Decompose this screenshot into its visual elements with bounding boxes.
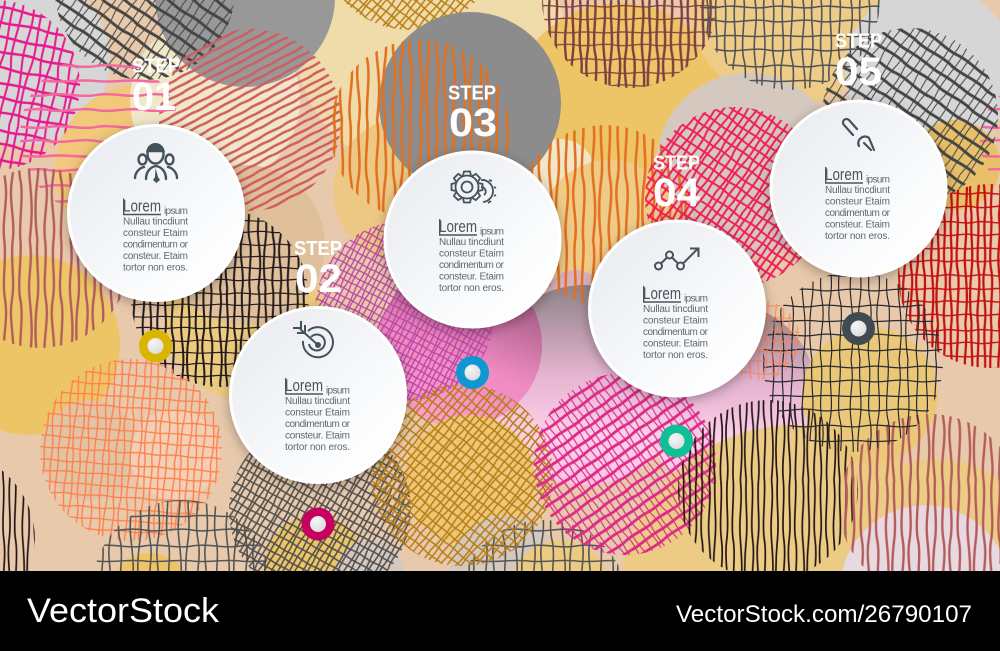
icon: chain links — [843, 119, 874, 150]
step 1 text — [123, 196, 189, 274]
step 4 label: 04 — [653, 171, 701, 215]
step 2 text — [285, 376, 351, 453]
step 4 label — [653, 152, 701, 215]
step 5 text — [825, 165, 891, 242]
step 3 text: condimentum or — [439, 260, 505, 271]
footer brand: VectorStock — [27, 592, 220, 630]
step 3 marker — [456, 356, 489, 389]
step 2 text: condimentum or — [285, 419, 351, 430]
step 1 text: condimentum or — [123, 240, 189, 250]
step 5 text: Nullau tincdiunt — [825, 185, 890, 196]
icon: team of people — [135, 144, 177, 183]
step 2 — [230, 238, 406, 540]
icon: target with arrow — [293, 321, 333, 357]
step 1 text: consteur. Etaim — [123, 251, 188, 262]
icon: rising chart line — [655, 248, 698, 270]
icon: gears — [452, 172, 496, 203]
step 3 text: consteur. Etaim — [439, 272, 504, 282]
step 5 marker — [842, 312, 875, 345]
step 5 — [771, 30, 946, 345]
step 2 text: tortor non eros. — [285, 442, 350, 453]
step 1 text: tortor non eros. — [123, 262, 188, 274]
step 1 — [68, 56, 244, 362]
step 1 text: ipsum — [164, 206, 188, 217]
step 3 text: ipsum — [480, 226, 504, 238]
step 4 disc — [590, 221, 764, 396]
step 3 text: Lorem — [439, 217, 477, 236]
step 3 label — [448, 82, 497, 145]
step 2 text: ipsum — [326, 386, 350, 396]
step 5 text: consteur Etaim — [825, 196, 890, 208]
step 2 disc — [230, 308, 406, 482]
step 1 disc — [68, 126, 244, 300]
footer bar — [0, 571, 1000, 651]
step 1 text: Lorem — [123, 196, 161, 216]
step 1 label: 01 — [132, 75, 176, 119]
step 4 text: Nullau tincdiunt — [643, 304, 708, 315]
step 5 disc — [771, 101, 946, 276]
step 3 label: STEP — [448, 82, 496, 104]
step 3 disc — [385, 152, 560, 327]
step 5 text: Lorem — [825, 165, 863, 184]
step 5 label: 05 — [835, 50, 882, 94]
step 5 label: STEP — [835, 30, 882, 52]
step 2 marker — [302, 508, 334, 540]
step 4 text: Lorem — [643, 284, 681, 303]
step 4 label: STEP — [653, 152, 700, 174]
step 3 — [385, 82, 560, 389]
step 2 label: 02 — [295, 257, 342, 301]
step 2 text: Nullau tincdiunt — [285, 396, 350, 407]
step 4 text: consteur. Etaim — [643, 338, 708, 350]
step 4 text: condimentum or — [643, 327, 709, 338]
step 5 label — [835, 30, 882, 94]
step 5 text: consteur. Etaim — [825, 220, 890, 230]
step 3 label: 03 — [449, 101, 497, 145]
step 1 text: Nullau tincdiunt — [123, 216, 188, 228]
footer image id: VectorStock.com/26790107 — [676, 601, 972, 628]
step 3 text: consteur Etaim — [439, 248, 504, 260]
step 4 text: consteur Etaim — [643, 316, 708, 326]
step 5 text: ipsum — [866, 174, 890, 186]
step 4 text: tortor non eros. — [643, 350, 708, 361]
step 5 text: tortor non eros. — [825, 231, 890, 242]
step 5 text: condimentum or — [825, 208, 891, 219]
step 3 text: tortor non eros. — [439, 283, 504, 294]
step 2 label — [294, 238, 342, 301]
step 3 text — [439, 217, 505, 294]
step 4 — [590, 152, 764, 458]
step 3 text: Nullau tincdiunt — [439, 237, 504, 248]
step 4 text — [643, 284, 709, 361]
step 1 marker — [139, 330, 172, 362]
step 4 marker — [660, 424, 693, 458]
step 2 text: consteur Etaim — [285, 408, 350, 418]
step 1 label — [132, 56, 180, 119]
step 4 text: ipsum — [684, 294, 708, 304]
step 2 text: Lorem — [285, 376, 323, 395]
step 1 label: STEP — [132, 56, 180, 78]
step 1 text: consteur Etaim — [123, 228, 188, 239]
step 2 text: consteur. Etaim — [285, 430, 350, 442]
step 2 label: STEP — [294, 238, 342, 260]
